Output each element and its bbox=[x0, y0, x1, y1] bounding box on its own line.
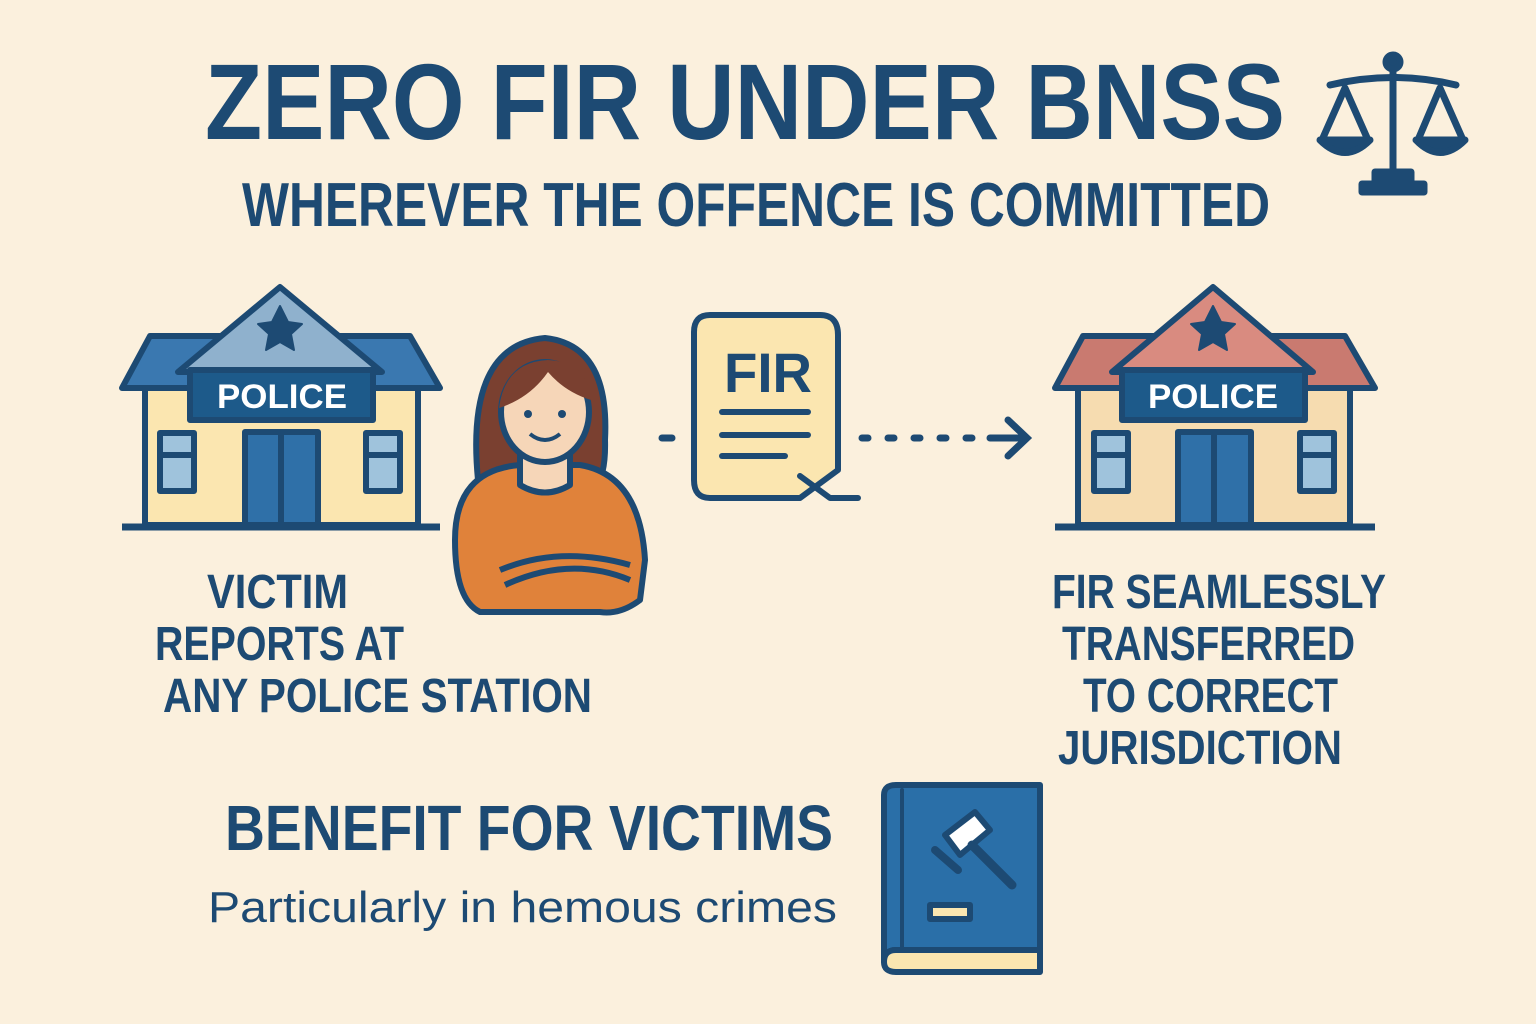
right caption: TRANSFERRED bbox=[1062, 618, 1355, 671]
subtitle: WHEREVER THE OFFENCE IS COMMITTED bbox=[242, 171, 1270, 240]
text: POLICE bbox=[1148, 378, 1278, 416]
icon: woman with crossed arms bbox=[455, 338, 645, 612]
left caption bbox=[155, 566, 592, 723]
right caption: FIR SEAMLESSLY bbox=[1052, 566, 1386, 619]
right caption: TO CORRECT bbox=[1083, 670, 1338, 723]
icon: FIR document bbox=[694, 315, 858, 498]
arrow: dotted transfer arrow bbox=[662, 420, 1027, 456]
icon: law book with gavel bbox=[884, 785, 1040, 972]
right caption bbox=[1052, 566, 1386, 775]
right caption: JURISDICTION bbox=[1058, 722, 1342, 775]
icon: police station left bbox=[122, 287, 440, 527]
left caption: REPORTS AT bbox=[155, 618, 404, 671]
icon: police station right bbox=[1055, 287, 1375, 527]
text: particularly in hemous crimes: Particularly in hemous crimes bbox=[208, 883, 837, 932]
left caption: VICTIM bbox=[207, 566, 348, 619]
left caption: ANY POLICE STATION bbox=[163, 670, 592, 723]
heading: benefit for victims: BENEFIT FOR VICTIMS bbox=[225, 792, 833, 864]
icon: scales of justice bbox=[1320, 55, 1465, 192]
text: FIR bbox=[724, 341, 812, 404]
text: POLICE bbox=[217, 378, 347, 416]
title: ZERO FIR UNDER BNSS bbox=[205, 41, 1285, 162]
